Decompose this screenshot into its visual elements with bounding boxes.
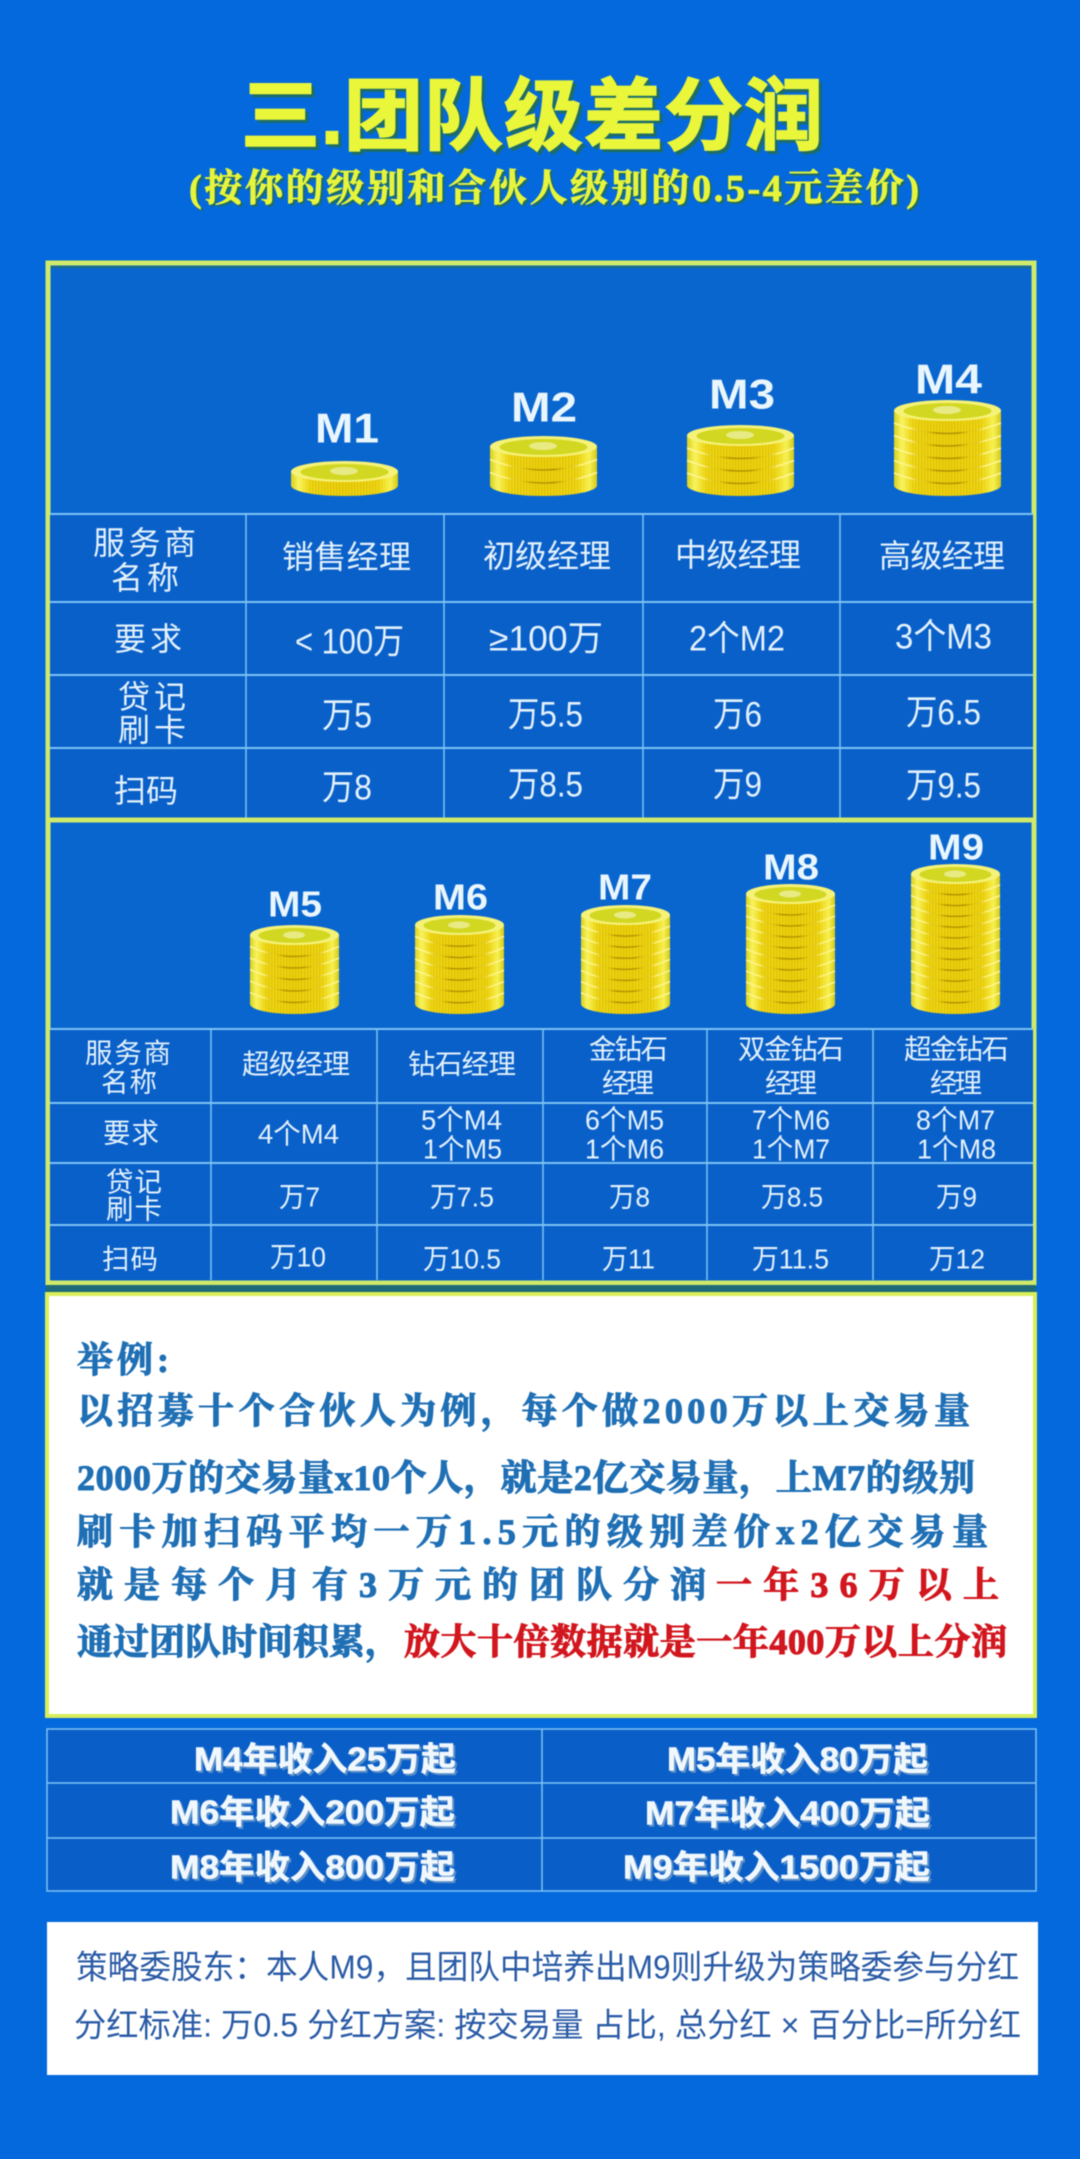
table grid M1-M4 bbox=[50, 514, 1033, 818]
row: requirement M5-M9: 8个M7 bbox=[916, 1104, 995, 1136]
example line 5 highlight: 放大十倍数据就是一年400万以上分润 bbox=[404, 1622, 1007, 1662]
row: service provider name M5-M9: 经理 bbox=[602, 1068, 654, 1098]
row: service provider name M5-M9 bbox=[85, 1034, 1009, 1098]
level labels M5-M9 bbox=[268, 826, 984, 924]
level labels M1-M4 bbox=[315, 356, 983, 452]
row: service provider name M5-M9: 经理 bbox=[930, 1068, 982, 1098]
row: requirement M5-M9: 1个M7 bbox=[752, 1134, 830, 1164]
row: credit card rate bbox=[118, 679, 981, 748]
level labels M5-M9: M9 bbox=[928, 826, 984, 868]
example line 4 highlight: 一年36万以上 bbox=[716, 1565, 999, 1605]
row: requirement M5-M9: 1个M6 bbox=[585, 1134, 664, 1164]
income grid bbox=[47, 1729, 1036, 1891]
level labels M5-M9: M5 bbox=[268, 884, 322, 924]
row: requirement: ≥100万 bbox=[489, 620, 603, 658]
row: requirement M5-M9: 5个M4 bbox=[421, 1104, 502, 1136]
coin stack: M8 bbox=[746, 884, 835, 1014]
row: service provider name: 初级经理 bbox=[483, 538, 611, 574]
panel: annual income table bbox=[47, 1729, 1036, 1891]
row: credit card rate: 万5.5 bbox=[508, 696, 583, 734]
example line 1: 以招募十个合伙人为例，每个做2000万以上交易量 bbox=[77, 1391, 970, 1432]
row: requirement M5-M9: 7个M6 bbox=[752, 1104, 830, 1136]
income labels: M7年收入400万起 bbox=[645, 1794, 930, 1832]
level labels M5-M9: M7 bbox=[598, 866, 652, 908]
coin stack: M4 bbox=[894, 400, 1001, 496]
row: QR code rate: 万8 bbox=[322, 768, 372, 808]
income labels: M8年收入800万起 bbox=[170, 1848, 455, 1886]
example line 4: 就是每个月有3万元的团队分润 bbox=[77, 1565, 706, 1605]
income labels: M6年收入200万起 bbox=[170, 1794, 455, 1830]
row: service provider name M5-M9: 金钻石 bbox=[589, 1034, 668, 1064]
row: service provider name: 销售经理 bbox=[282, 539, 411, 575]
row: requirement M5-M9 bbox=[103, 1104, 996, 1164]
coin stack: M6 bbox=[415, 915, 504, 1014]
row: service provider name: 服务商 bbox=[93, 525, 196, 561]
note line 2: 分红标准: 万0.5 分红方案: 按交易量 占比, 总分红 × 百分比=所分红 bbox=[74, 2006, 1021, 2044]
income labels bbox=[170, 1740, 930, 1886]
row: QR code rate M5-M9: 万11.5 bbox=[752, 1244, 829, 1274]
level labels M5-M9: M8 bbox=[763, 846, 819, 888]
panel: strategy committee note bbox=[47, 1922, 1038, 2075]
row: service provider name M5-M9: 双金钻石 bbox=[738, 1034, 844, 1064]
level labels M1-M4: M4 bbox=[915, 356, 983, 402]
row: service provider name: 名称 bbox=[111, 560, 179, 596]
row: credit card rate M5-M9: 刷卡 bbox=[106, 1194, 162, 1224]
row: service provider name M5-M9: 钻石经理 bbox=[408, 1048, 516, 1080]
table background M1-M4 bbox=[50, 514, 1033, 818]
income labels: M4年收入25万起 bbox=[194, 1740, 456, 1778]
row: QR code rate M5-M9: 扫码 bbox=[102, 1244, 158, 1274]
coin stack: M9 bbox=[911, 864, 1000, 1014]
row: QR code rate: 万9.5 bbox=[906, 766, 981, 806]
example line 3: 刷卡加扫码平均一万1.5元的级别差价x2亿交易量 bbox=[77, 1512, 988, 1552]
subtitle: (按你的级别和合伙人级别的0.5-4元差价) bbox=[189, 168, 919, 210]
row: requirement: 2个M2 bbox=[689, 620, 785, 658]
coin stack: M2 bbox=[490, 436, 597, 496]
row: requirement: 要求 bbox=[114, 621, 182, 657]
row: QR code rate M5-M9 bbox=[102, 1242, 985, 1274]
level labels M5-M9: M6 bbox=[433, 876, 488, 918]
row: service provider name: 中级经理 bbox=[675, 537, 801, 573]
level labels M1-M4: M3 bbox=[709, 370, 775, 418]
row: requirement: < 100万 bbox=[295, 622, 404, 662]
row: QR code rate: 万9 bbox=[713, 766, 762, 804]
row: requirement bbox=[114, 618, 992, 662]
row: QR code rate M5-M9: 万12 bbox=[929, 1244, 985, 1274]
table grid M5-M9 bbox=[50, 1029, 1033, 1280]
income labels: M9年收入1500万起 bbox=[623, 1848, 930, 1886]
row: QR code rate M5-M9: 万10.5 bbox=[423, 1244, 501, 1274]
coin stack: M7 bbox=[581, 905, 670, 1014]
example line 2: 2000万的交易量x10个人，就是2亿交易量，上M7的级别 bbox=[77, 1458, 975, 1499]
row: service provider name bbox=[93, 525, 1005, 596]
title: 三.团队级差分润 bbox=[241, 72, 823, 160]
row: credit card rate M5-M9: 万8 bbox=[609, 1182, 650, 1212]
example heading: 举例: bbox=[77, 1340, 169, 1380]
panel: levels M1 to M4 bbox=[48, 263, 1034, 820]
row: QR code rate M5-M9: 万11 bbox=[602, 1244, 655, 1274]
row: QR code rate M5-M9: 万10 bbox=[270, 1242, 326, 1272]
row: credit card rate M5-M9: 万9 bbox=[936, 1182, 977, 1212]
row: service provider name M5-M9: 超级经理 bbox=[242, 1048, 350, 1080]
note line 1: 策略委股东：本人M9，且团队中培养出M9则升级为策略委参与分红 bbox=[76, 1948, 1019, 1986]
row: credit card rate: 万6.5 bbox=[906, 694, 981, 732]
row: QR code rate: 万8.5 bbox=[508, 766, 583, 804]
row: requirement M5-M9: 1个M5 bbox=[423, 1134, 502, 1164]
coin stack: M3 bbox=[687, 425, 794, 496]
row: requirement: 3个M3 bbox=[895, 618, 992, 656]
row: credit card rate M5-M9: 贷记 bbox=[106, 1166, 162, 1198]
row: credit card rate: 万6 bbox=[713, 696, 762, 734]
row: service provider name M5-M9: 超金钻石 bbox=[904, 1034, 1009, 1064]
lower shadow band bbox=[46, 1285, 1036, 1292]
row: requirement M5-M9: 要求 bbox=[103, 1118, 159, 1148]
row: credit card rate M5-M9 bbox=[106, 1166, 977, 1224]
row: requirement M5-M9: 6个M5 bbox=[585, 1104, 664, 1136]
row: QR code rate bbox=[114, 766, 981, 809]
example line 5: 通过团队时间积累， bbox=[77, 1622, 401, 1663]
table background M5-M9 bbox=[50, 1029, 1033, 1280]
row: credit card rate M5-M9: 万7.5 bbox=[430, 1182, 494, 1212]
row: credit card rate: 万5 bbox=[322, 696, 372, 736]
level labels M1-M4: M1 bbox=[315, 404, 379, 452]
row: credit card rate M5-M9: 万8.5 bbox=[761, 1182, 823, 1212]
row: service provider name M5-M9: 服务商 bbox=[85, 1038, 171, 1068]
panel: worked example bbox=[47, 1294, 1035, 1716]
row: service provider name M5-M9: 经理 bbox=[765, 1068, 817, 1098]
income labels: M5年收入80万起 bbox=[667, 1740, 928, 1778]
row: QR code rate: 扫码 bbox=[114, 773, 178, 809]
level labels M1-M4: M2 bbox=[511, 384, 577, 430]
row: credit card rate: 贷记 bbox=[118, 679, 186, 715]
panel: levels M5 to M9 bbox=[46, 820, 1036, 1292]
row: credit card rate M5-M9: 万7 bbox=[279, 1182, 320, 1212]
coin stack: M5 bbox=[250, 925, 339, 1014]
row: service provider name M5-M9: 名称 bbox=[101, 1066, 157, 1098]
coin stack: M1 bbox=[291, 461, 398, 496]
row: service provider name: 高级经理 bbox=[879, 538, 1005, 574]
row: requirement M5-M9: 4个M4 bbox=[258, 1118, 339, 1150]
row: requirement M5-M9: 1个M8 bbox=[917, 1134, 996, 1164]
row: credit card rate: 刷卡 bbox=[118, 712, 186, 748]
